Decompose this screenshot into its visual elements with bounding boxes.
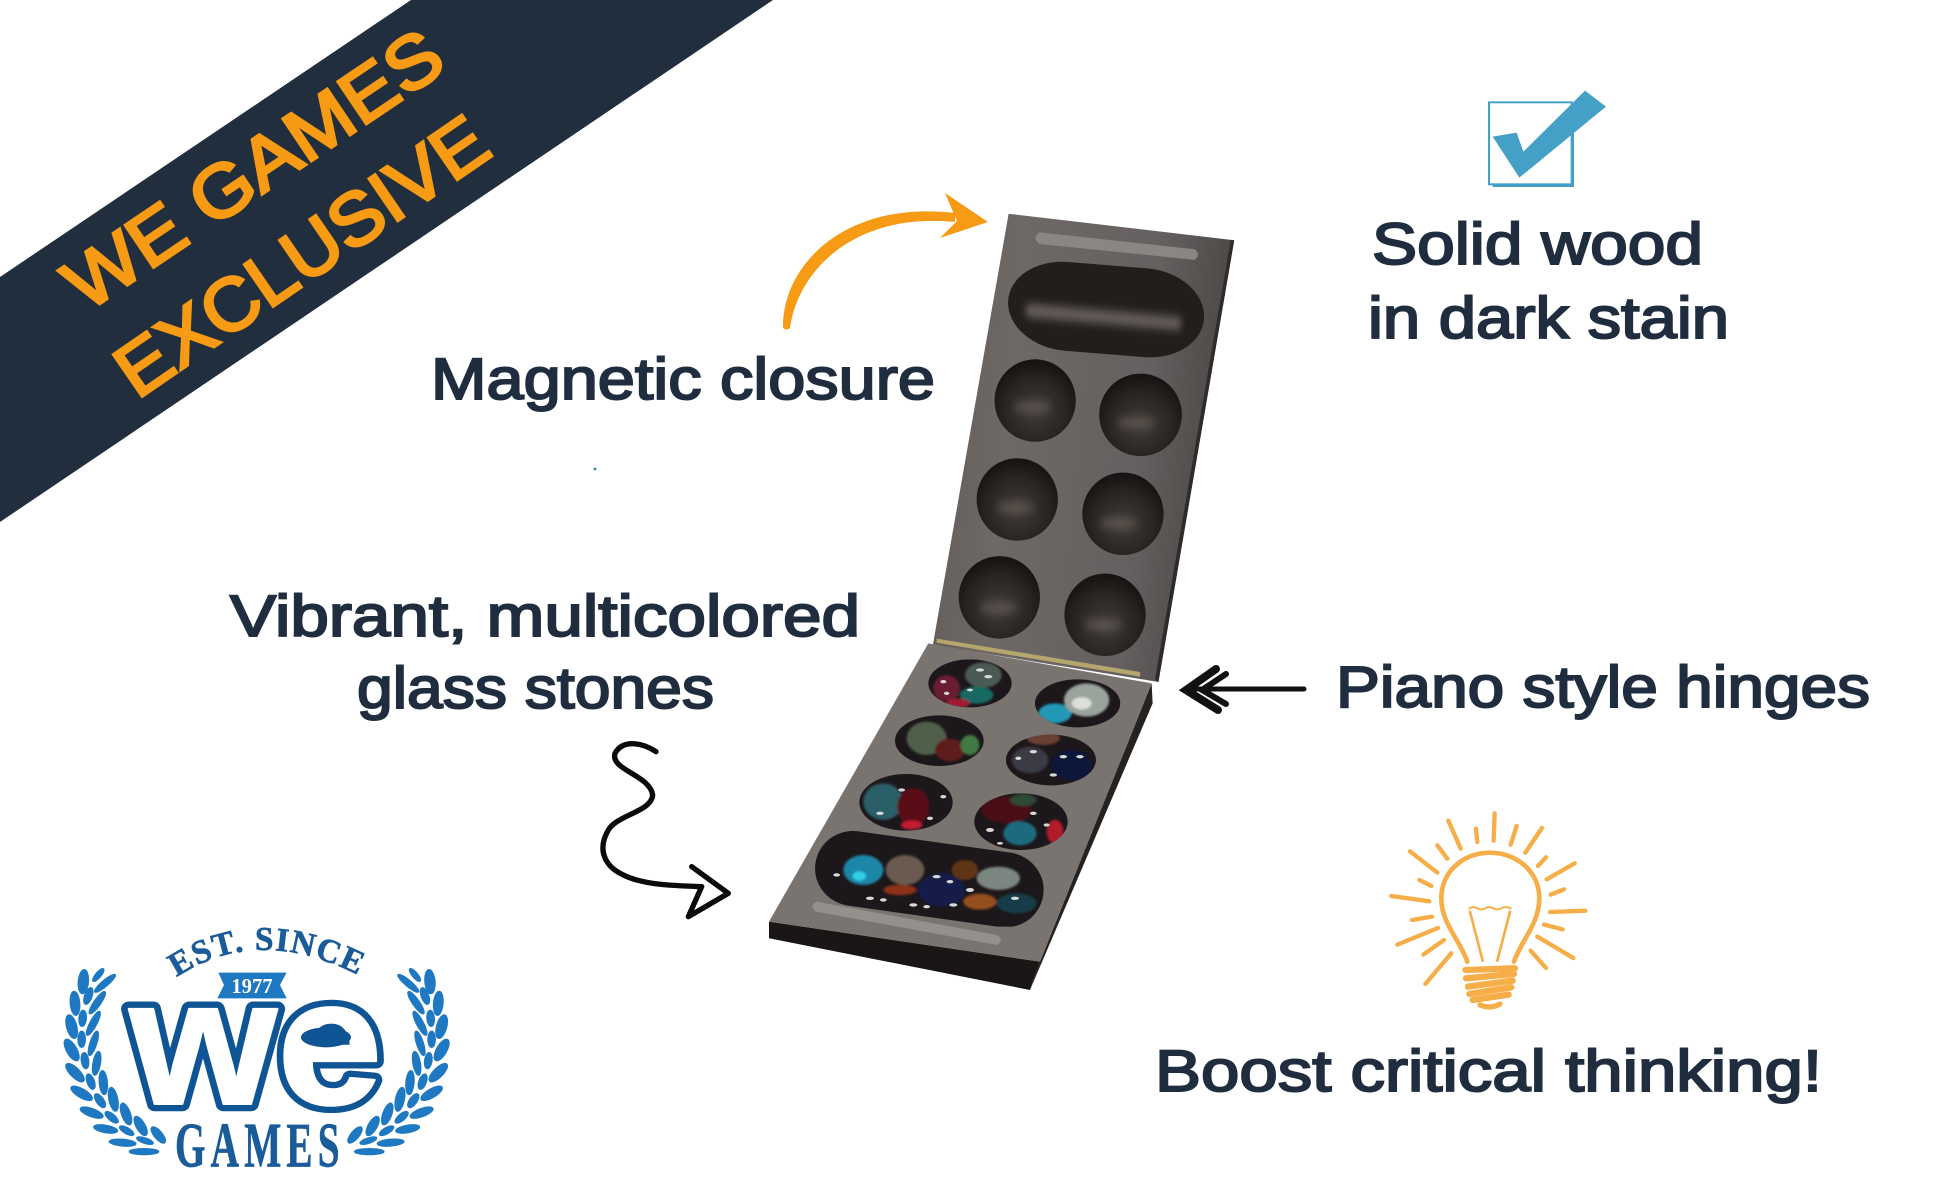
logo: we games: [64, 928, 450, 1181]
label: boost critical thinking: Boost critical thinking!: [1155, 1039, 1822, 1104]
piano hinge: [937, 639, 1140, 677]
label: solid wood: Solid wood: [1372, 212, 1703, 277]
label: dark stain: in dark stain: [1368, 286, 1729, 351]
year ribbon: 1977: [231, 976, 273, 998]
we wordmark: we: [128, 942, 383, 1143]
stray dot: [594, 468, 596, 470]
label: vibrant stones line 2: glass stones: [357, 656, 714, 721]
label: magnetic closure: Magnetic closure: [431, 347, 935, 412]
banner ribbon: [0, 0, 773, 522]
banner text line 2: EXCLUSIVE: [99, 99, 504, 413]
arrow: magnetic closure: [783, 193, 988, 330]
year ribbon: [217, 973, 287, 998]
lid magnetic strip: [1035, 232, 1198, 260]
mancala board product: [769, 214, 1234, 990]
label: vibrant stones line 1: Vibrant, multicolored: [230, 584, 860, 649]
banner: we games exclusive: [0, 0, 773, 522]
left laurel: [61, 967, 168, 1155]
icon: light bulb: [1391, 813, 1585, 1007]
tray strip: [812, 902, 1001, 945]
we wordmark: we: [128, 942, 383, 1143]
icon: check box: [1489, 91, 1606, 187]
lid trough: [1007, 257, 1206, 362]
right laurel: [345, 967, 452, 1155]
arrow: piano hinges: [1186, 669, 1304, 710]
board tray: [769, 639, 1153, 990]
est since: EST. SINCE: [166, 928, 365, 978]
banner text line 1: WE GAMES: [49, 13, 458, 326]
lid cups: [959, 359, 1182, 656]
arrow: squiggle to stones: [603, 744, 728, 917]
tray cups with glass stones: [810, 653, 1130, 927]
label: piano hinges: Piano style hinges: [1336, 655, 1870, 720]
games: GAMES: [175, 1111, 345, 1181]
board lid: [933, 214, 1234, 682]
